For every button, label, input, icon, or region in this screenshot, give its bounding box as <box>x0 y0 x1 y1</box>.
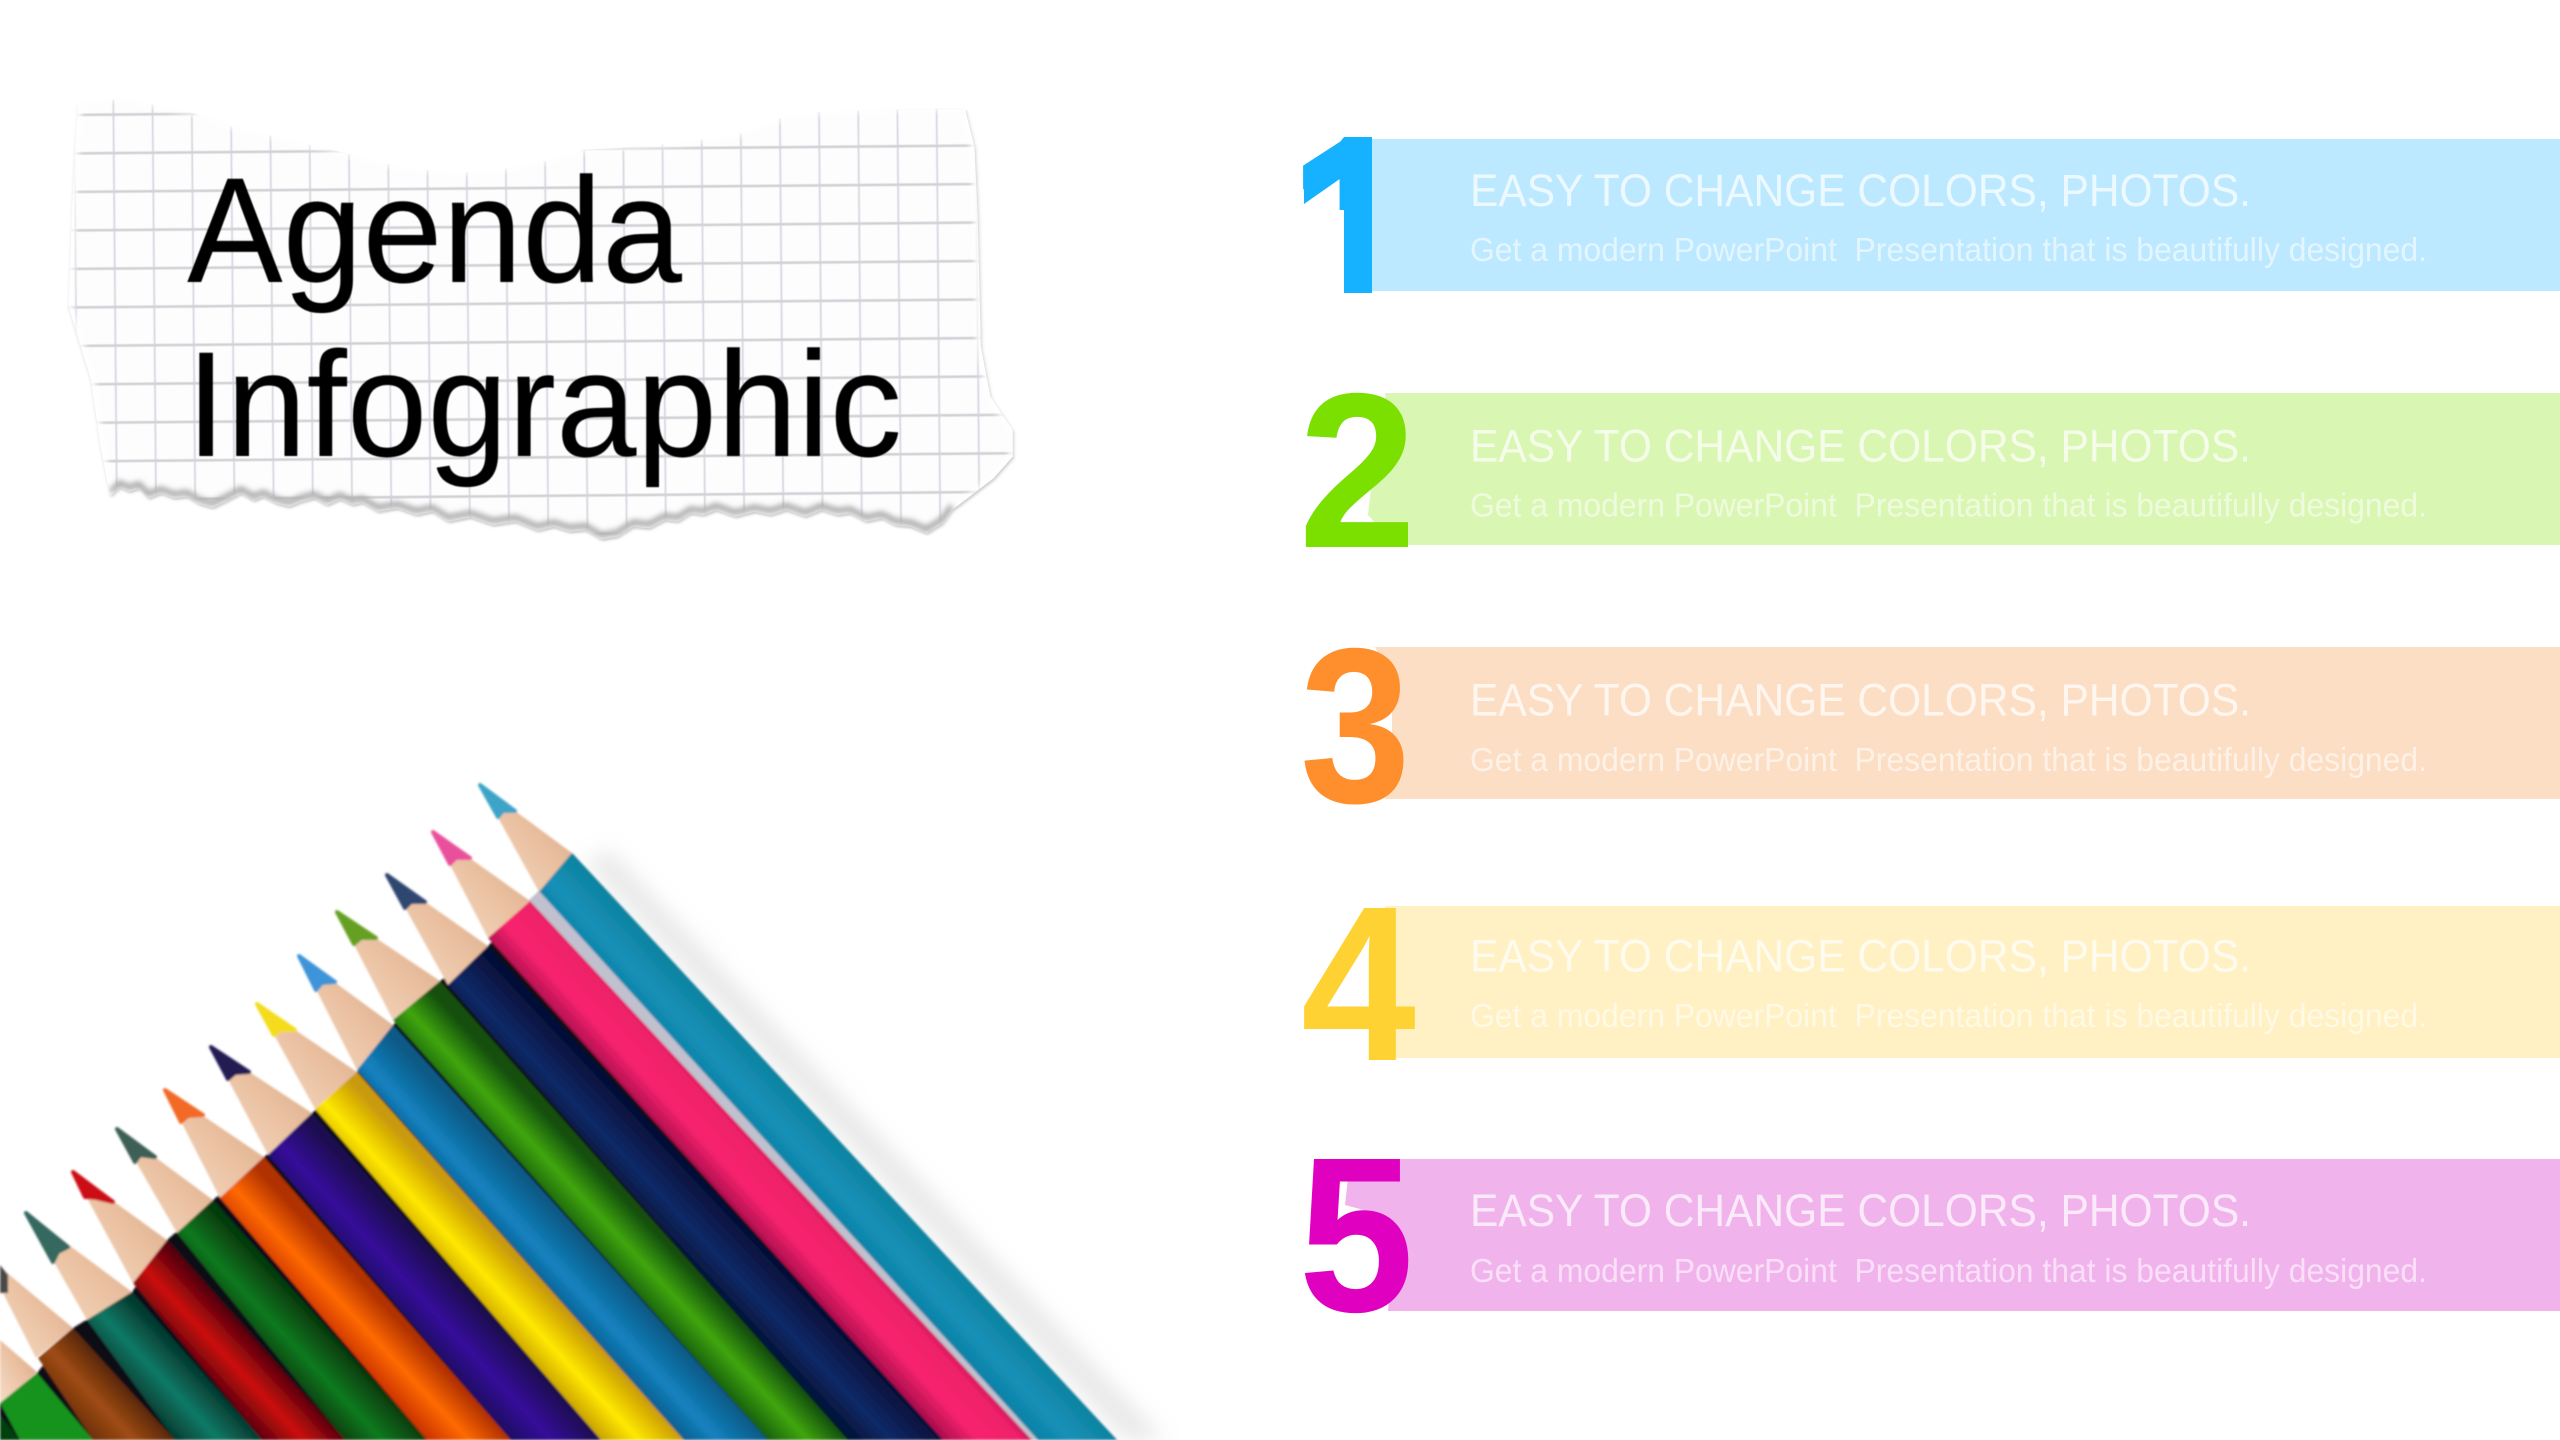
heading 5: EASY TO CHANGE COLORS, PHOTOS. <box>1470 1185 2251 1236</box>
pencil: yellow <box>257 1004 684 1440</box>
pencil shadow <box>585 850 1165 1440</box>
number 1 <box>1303 137 1372 293</box>
title line: Infographic: Infographic <box>186 320 902 488</box>
number 1: 1 <box>1288 93 1411 340</box>
bar 5 <box>1345 1159 2560 1311</box>
panel: torn graph paper <box>50 90 1040 560</box>
bar 3 <box>1375 647 2560 799</box>
pencil: teal <box>480 785 1117 1440</box>
agenda item 5 <box>1298 1112 2560 1358</box>
pencil: green <box>0 1340 93 1440</box>
number 5: 5 <box>1298 1112 1414 1358</box>
pencil: dark green stub <box>0 1415 20 1440</box>
description 4: Get a modern PowerPoint Presentation that is beautifully designed. <box>1470 997 2427 1034</box>
agenda item 3 <box>1300 602 2560 849</box>
description 5: Get a modern PowerPoint Presentation that is beautifully designed. <box>1470 1252 2427 1289</box>
bar 1 <box>1360 139 2560 291</box>
number 3: 3 <box>1300 602 1411 849</box>
pencil: dark green <box>117 1129 427 1440</box>
agenda item 1 <box>1303 137 2560 293</box>
pencil: pink <box>433 832 1035 1440</box>
pencils group <box>0 785 1165 1440</box>
pencil: green bright <box>337 912 848 1440</box>
pencil: red <box>73 1172 345 1440</box>
agenda item 4 <box>1301 861 2560 1108</box>
pencil: teal green <box>26 1213 262 1440</box>
heading 2: EASY TO CHANGE COLORS, PHOTOS. <box>1470 420 2251 472</box>
heading 3: EASY TO CHANGE COLORS, PHOTOS. <box>1470 674 2251 726</box>
number 4: 4 <box>1301 861 1416 1108</box>
description 2: Get a modern PowerPoint Presentation that is beautifully designed. <box>1470 486 2427 524</box>
title <box>186 146 902 488</box>
dark gaps between pencils <box>0 853 1117 1440</box>
number 2: 2 <box>1298 347 1416 594</box>
description 3: Get a modern PowerPoint Presentation that is beautifully designed. <box>1470 741 2427 778</box>
pencil: navy <box>387 875 943 1440</box>
pencil: brown <box>0 1265 175 1440</box>
title line: Agenda: Agenda <box>187 146 683 314</box>
pencil: orange <box>165 1090 511 1440</box>
pencil: purple <box>211 1047 601 1440</box>
heading 1: EASY TO CHANGE COLORS, PHOTOS. <box>1470 165 2251 216</box>
silver gap between pink and teal pencils <box>529 891 1038 1440</box>
paper sheet <box>70 100 1012 540</box>
heading 4: EASY TO CHANGE COLORS, PHOTOS. <box>1470 930 2251 982</box>
paper grid lines <box>70 100 1012 539</box>
pencil: blue <box>299 956 768 1440</box>
agenda item 2 <box>1298 347 2560 594</box>
description 1: Get a modern PowerPoint Presentation that is beautifully designed. <box>1470 231 2427 268</box>
bar 2 <box>1368 393 2560 545</box>
bar 4 <box>1385 906 2560 1058</box>
paper shadow <box>70 100 1014 541</box>
